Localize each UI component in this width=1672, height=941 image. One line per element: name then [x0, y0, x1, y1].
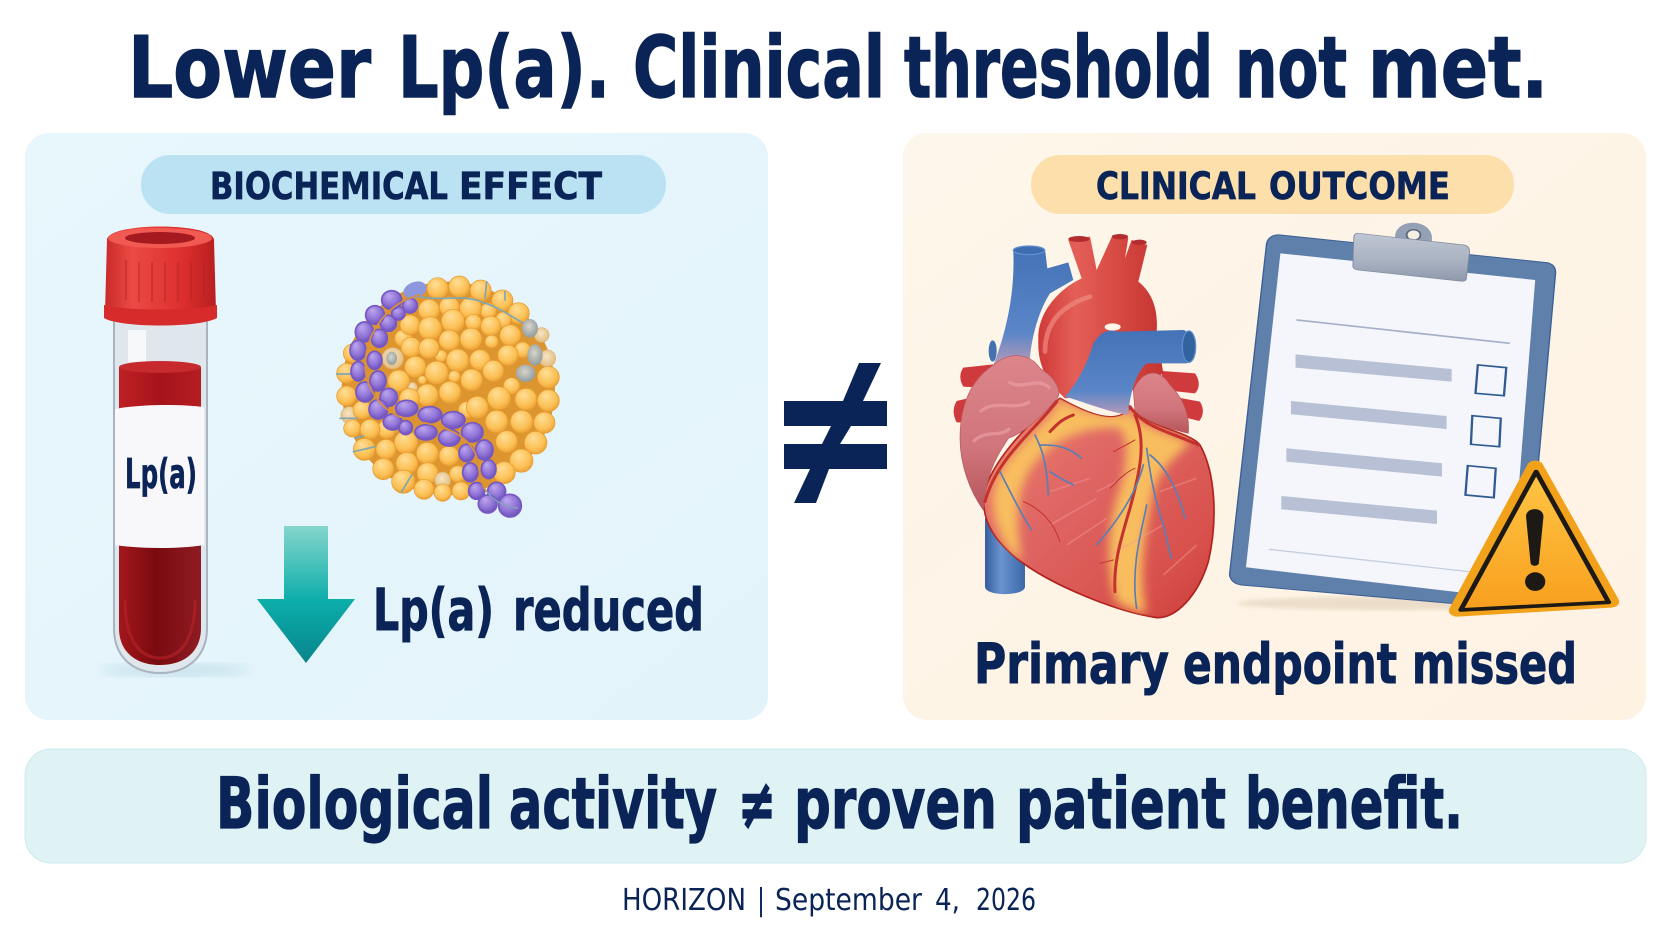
label: Lp(a) reduced: Lp(a) [373, 576, 494, 644]
title: Lower [128, 19, 371, 118]
banner: takeaway: Biological [216, 763, 493, 845]
footer: source and date: HORIZON [622, 883, 746, 918]
coronary vessels [985, 402, 1198, 608]
right atrium [1133, 373, 1189, 433]
footer: source and date: September [775, 883, 923, 918]
icon: Lp(a) particle [337, 276, 559, 517]
pulmonary artery [1065, 330, 1193, 415]
tube label: Lp(a) [125, 450, 197, 498]
superior vena cava [989, 246, 1073, 365]
icon: blood test tube [100, 226, 250, 676]
paper [1246, 253, 1535, 598]
icon: warning triangle [1457, 467, 1611, 611]
banner: takeaway: proven [794, 763, 997, 845]
banner: takeaway [25, 749, 1646, 863]
icon: heart [954, 234, 1214, 618]
checklist lines [1281, 354, 1452, 524]
banner: takeaway: activity [509, 763, 717, 845]
left atrium [960, 356, 1059, 510]
arrow: down [257, 526, 355, 663]
pill heading: clinical outcome: OUTCOME [1269, 165, 1450, 208]
board [1230, 235, 1556, 608]
banner: takeaway: ≠ [738, 763, 776, 845]
checkboxes [1465, 365, 1506, 498]
title: Clinical [633, 19, 885, 118]
title: Lp(a). [398, 19, 610, 118]
pill heading: biochemical effect [141, 155, 666, 214]
pill heading: clinical outcome: CLINICAL [1096, 165, 1256, 208]
tube label [115, 405, 204, 548]
aortic arch and branches [1038, 234, 1163, 398]
panel: clinical outcome [903, 133, 1646, 720]
banner: takeaway: patient [1016, 763, 1226, 845]
footer: source and date: 2026 [976, 883, 1036, 918]
heart body [983, 398, 1214, 618]
pill heading: biochemical effect: EFFECT [459, 165, 603, 208]
panel: biochemical effect [25, 133, 768, 720]
label: primary endpoint missed: missed [1412, 632, 1577, 696]
pulmonary veins [954, 364, 1203, 422]
title: not [1235, 19, 1347, 118]
inferior vena cava [985, 518, 1025, 594]
icon: clipboard [1230, 223, 1611, 611]
label: Lp(a) reduced: reduced [513, 576, 704, 644]
not-equal sign [784, 363, 887, 503]
tube cap [104, 226, 217, 326]
label: primary endpoint missed: Primary [974, 632, 1169, 696]
label: primary endpoint missed: endpoint [1183, 632, 1397, 696]
pill heading: clinical outcome [1031, 155, 1514, 214]
clip [1353, 223, 1470, 281]
title: met. [1368, 19, 1548, 118]
footer: source and date: 4, [935, 883, 960, 918]
banner: takeaway: benefit. [1245, 763, 1463, 845]
pill heading: biochemical effect: BIOCHEMICAL [210, 165, 448, 208]
title: threshold [904, 19, 1213, 118]
footer: source and date: | [757, 883, 765, 918]
